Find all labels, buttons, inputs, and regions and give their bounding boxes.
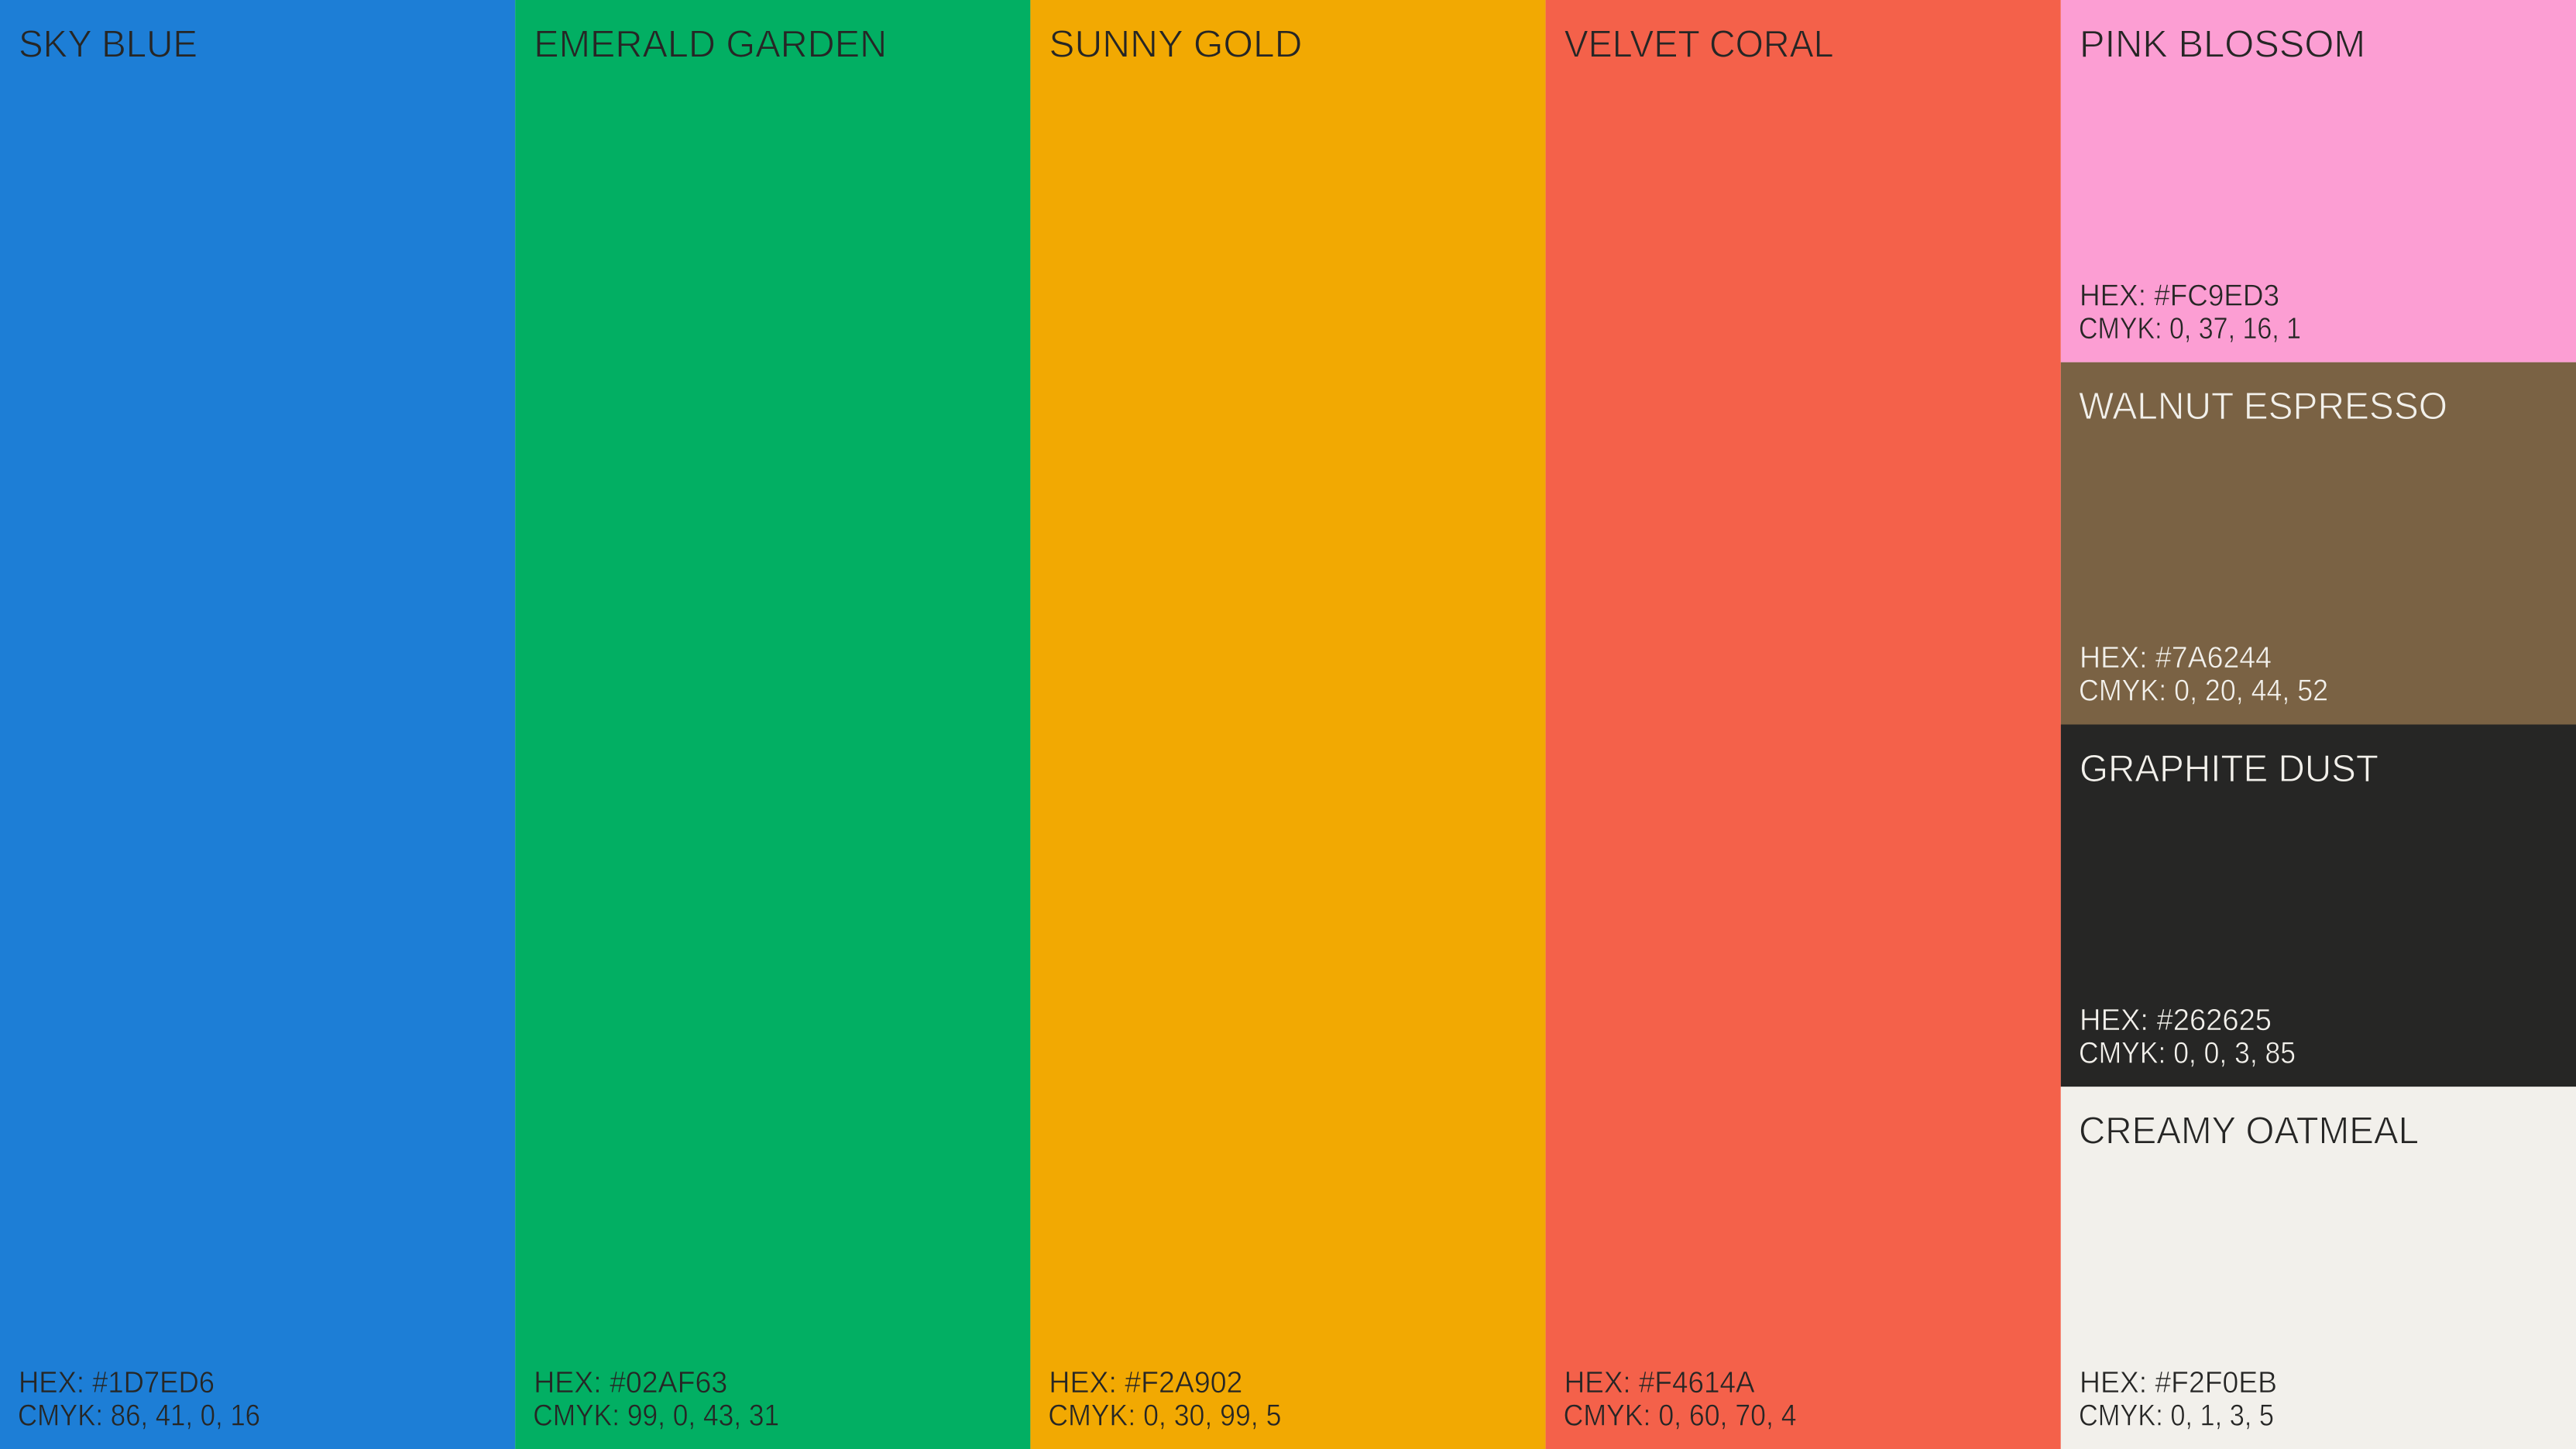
text: emerald garden hex: HEX: #02AF63 bbox=[534, 1366, 727, 1399]
panel: walnut espresso bbox=[2061, 362, 2576, 725]
heading: sky blue: SKY BLUE bbox=[19, 23, 197, 65]
panel: emerald garden bbox=[515, 0, 1030, 1449]
heading: graphite dust: GRAPHITE DUST bbox=[2080, 747, 2379, 790]
text: walnut espresso cmyk: CMYK: 0, 20, 44, 52 bbox=[2079, 674, 2328, 708]
heading: velvet coral: VELVET CORAL bbox=[1564, 23, 1834, 65]
text: sunny gold hex: HEX: #F2A902 bbox=[1049, 1366, 1242, 1399]
panel: pink blossom bbox=[2061, 0, 2576, 362]
text: creamy oatmeal hex: HEX: #F2F0EB bbox=[2080, 1366, 2277, 1399]
panel: sky blue bbox=[0, 0, 515, 1449]
text: graphite dust cmyk: CMYK: 0, 0, 3, 85 bbox=[2079, 1036, 2296, 1070]
text: sky blue cmyk: CMYK: 86, 41, 0, 16 bbox=[18, 1399, 260, 1433]
text: pink blossom hex: HEX: #FC9ED3 bbox=[2080, 279, 2279, 313]
text: creamy oatmeal cmyk: CMYK: 0, 1, 3, 5 bbox=[2079, 1399, 2274, 1433]
text: velvet coral hex: HEX: #F4614A bbox=[1564, 1366, 1755, 1399]
text: emerald garden cmyk: CMYK: 99, 0, 43, 31 bbox=[533, 1399, 779, 1433]
text: sunny gold cmyk: CMYK: 0, 30, 99, 5 bbox=[1048, 1399, 1281, 1433]
panel: sunny gold bbox=[1030, 0, 1546, 1449]
heading: pink blossom: PINK BLOSSOM bbox=[2080, 23, 2365, 65]
heading: walnut espresso: WALNUT ESPRESSO bbox=[2079, 385, 2447, 427]
panel: creamy oatmeal bbox=[2061, 1087, 2576, 1449]
heading: sunny gold: SUNNY GOLD bbox=[1049, 23, 1302, 65]
heading: emerald garden: EMERALD GARDEN bbox=[534, 23, 887, 65]
text: pink blossom cmyk: CMYK: 0, 37, 16, 1 bbox=[2079, 312, 2301, 345]
heading: creamy oatmeal: CREAMY OATMEAL bbox=[2079, 1109, 2419, 1152]
panel: graphite dust bbox=[2061, 725, 2576, 1087]
text: velvet coral cmyk: CMYK: 0, 60, 70, 4 bbox=[1564, 1399, 1797, 1433]
panel: velvet coral bbox=[1546, 0, 2061, 1449]
text: graphite dust hex: HEX: #262625 bbox=[2080, 1004, 2272, 1037]
text: walnut espresso hex: HEX: #7A6244 bbox=[2080, 641, 2272, 675]
text: sky blue hex: HEX: #1D7ED6 bbox=[19, 1366, 215, 1399]
